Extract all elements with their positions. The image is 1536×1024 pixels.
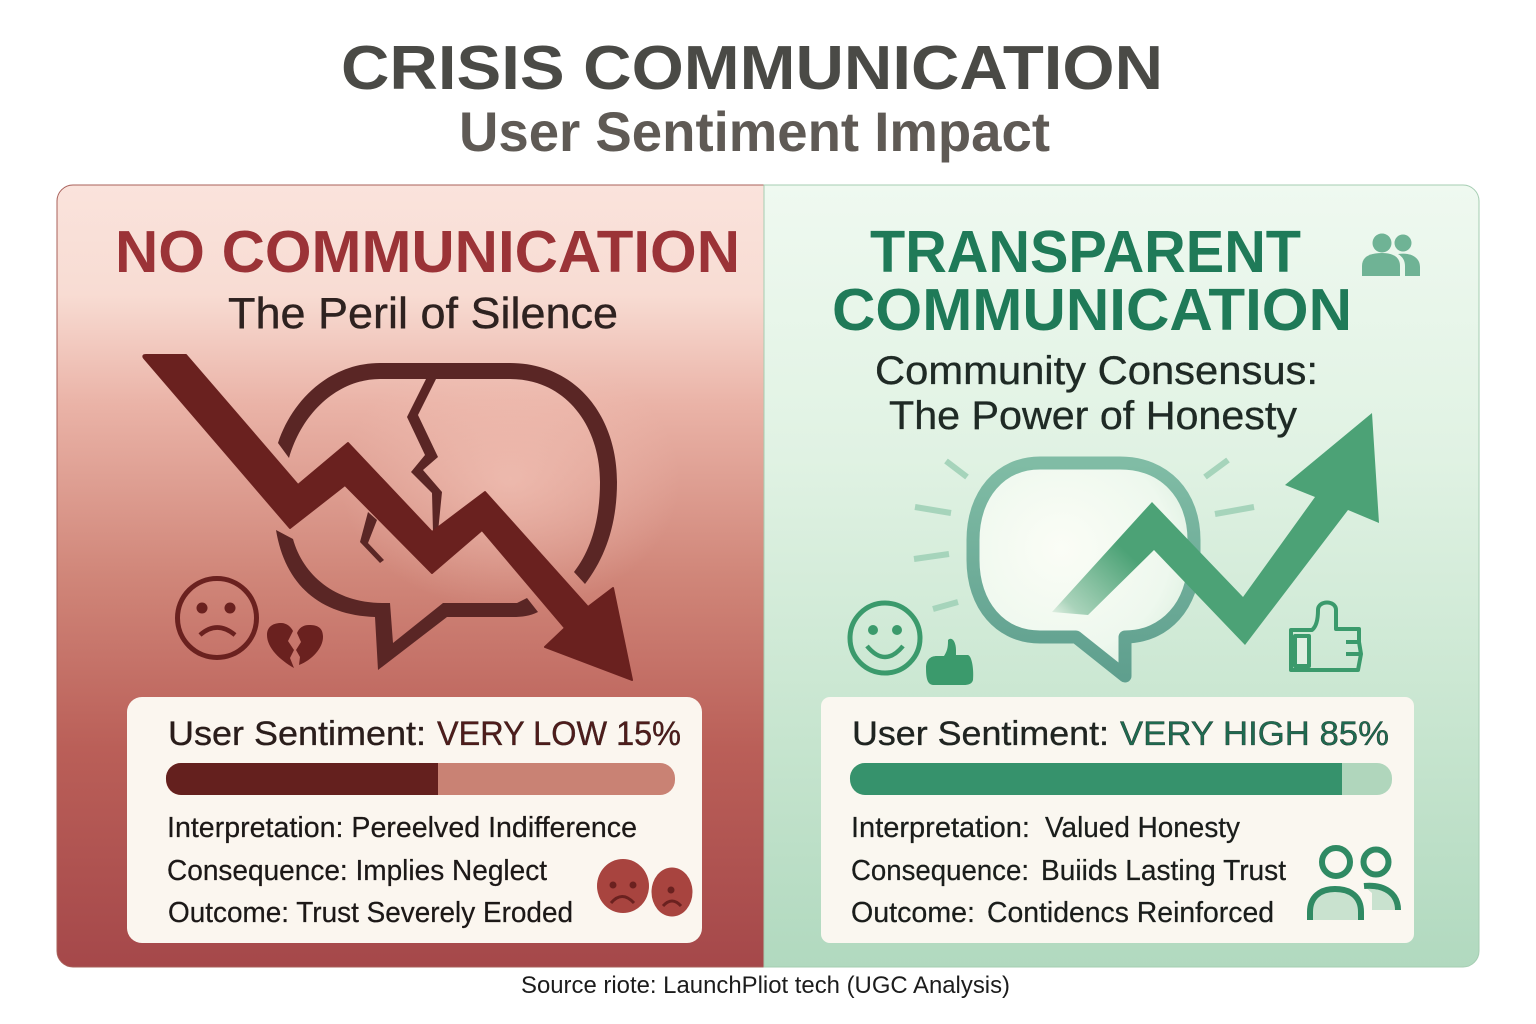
icon: outline thumb — [1291, 602, 1361, 670]
sentiment label: VERY LOW 15% — [437, 715, 681, 753]
icon: broken speech bubble — [276, 363, 617, 670]
source note: Source riote: LaunchPliot tech (UGC Analysis) — [521, 972, 1010, 999]
heading: transparent communication — [832, 219, 1352, 343]
details: Consequence: Implies Neglect — [167, 855, 547, 887]
card: very low sentiment — [127, 697, 702, 943]
details: Buiids Lasting Trust — [1041, 855, 1286, 887]
details: Contidencs Reinforced — [987, 897, 1274, 929]
icon: rising arrow — [1052, 413, 1379, 645]
icon: two people — [1310, 848, 1398, 920]
sentiment label: User Sentiment: — [852, 715, 1109, 753]
icon: smiley face — [850, 603, 920, 673]
icon: community — [1362, 234, 1420, 276]
subheading: the peril of silence: The Peril of Silence — [228, 289, 618, 338]
icon: falling arrow — [143, 355, 632, 680]
icon: sad face — [178, 578, 256, 658]
icon: sad faces — [597, 859, 692, 916]
title: CRISIS COMMUNICATION — [341, 34, 1163, 103]
details: Interpretation: Pereelved Indifference — [167, 812, 637, 844]
subheading: community consensus — [875, 349, 1318, 438]
heading: transparent communication: COMMUNICATION — [832, 277, 1352, 343]
details: Interpretation: — [851, 812, 1030, 844]
details: Valued Honesty — [1045, 812, 1240, 844]
details — [167, 812, 637, 929]
panel: no communication — [57, 185, 764, 967]
details: Consequence: — [851, 855, 1029, 887]
sentiment bar — [166, 763, 675, 795]
subtitle: User Sentiment Impact — [459, 100, 1050, 163]
icon: broken heart — [267, 623, 323, 668]
subheading: community consensus: Community Consensus: — [875, 349, 1318, 393]
icon: filled thumb — [926, 639, 973, 685]
sentiment label: VERY HIGH 85% — [1120, 715, 1389, 753]
card: very high sentiment — [821, 697, 1414, 943]
details: Outcome: Trust Severely Eroded — [168, 897, 573, 929]
sentiment bar — [850, 763, 1392, 795]
details: Outcome: — [851, 897, 975, 929]
details — [851, 812, 1286, 929]
sentiment label: User Sentiment: — [168, 715, 426, 753]
heading: no communication: NO COMMUNICATION — [115, 219, 740, 285]
icon: rays — [914, 460, 1254, 609]
heading: transparent communication: TRANSPARENT — [870, 219, 1301, 285]
icon: speech bubble — [973, 463, 1194, 676]
subheading: community consensus: The Power of Honesty — [889, 394, 1297, 438]
panel: transparent communication — [764, 185, 1479, 967]
